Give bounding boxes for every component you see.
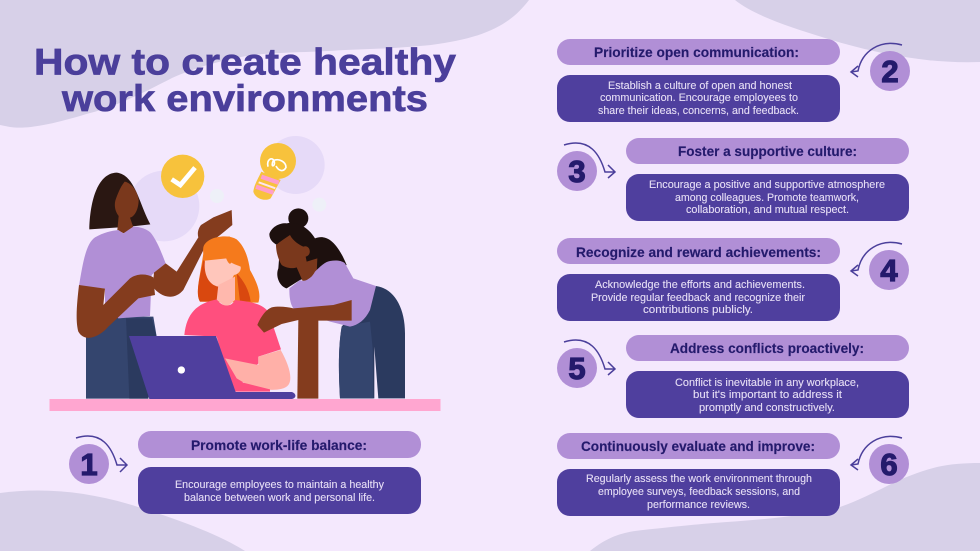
body 2: communication. Encourage employees to [600, 92, 798, 104]
number badge 3 [557, 151, 597, 191]
heading 6: Continuously evaluate and improve: [581, 438, 815, 454]
table top [50, 399, 440, 411]
icon: check mark badge [161, 155, 204, 198]
number badge 5 [557, 348, 597, 388]
background blob: bottom left [0, 491, 245, 551]
arrow 5 [564, 340, 615, 375]
number badge 1 [69, 444, 109, 484]
body 6 [557, 469, 840, 516]
body 3: Encourage a positive and supportive atmosphere [649, 179, 885, 191]
body 5: promptly and constructively. [699, 402, 835, 414]
woman right [257, 208, 405, 399]
body 1 [138, 467, 421, 514]
number badge 2: 2 [881, 54, 899, 89]
heading 2 [557, 39, 840, 65]
background bubbles [129, 136, 326, 241]
illustration: three women at a laptop [77, 136, 405, 399]
heading 4: Recognize and reward achievements: [576, 244, 821, 260]
background blob: top right [735, 0, 980, 62]
step 6: continuously evaluate and improve [557, 433, 909, 516]
number badge 4 [869, 250, 909, 290]
body 2: share their ideas, concerns, and feedback. [598, 105, 799, 117]
heading 6 [557, 433, 840, 459]
heading 3 [626, 138, 909, 164]
number badge 1: 1 [80, 447, 98, 482]
body 6: employee surveys, feedback sessions, and [598, 486, 800, 498]
title: work environments [61, 78, 428, 119]
arrow 1 [76, 436, 127, 472]
woman left [77, 173, 232, 399]
heading 3: Foster a supportive culture: [678, 143, 857, 159]
heading 5: Address conflicts proactively: [670, 340, 864, 356]
number badge 4: 4 [880, 253, 898, 288]
step 5: address conflicts proactively [557, 335, 909, 418]
number badge 5: 5 [568, 351, 586, 386]
heading 2: Prioritize open communication: [594, 44, 799, 60]
body 5: Conflict is inevitable in any workplace, [675, 377, 859, 389]
body 4: Provide regular feedback and recognize their [591, 292, 805, 304]
body 4: contributions publicly. [643, 304, 753, 316]
body 1: Encourage employees to maintain a healthy [175, 479, 384, 491]
body 4: Acknowledge the efforts and achievements. [595, 279, 805, 291]
body 3 [626, 174, 909, 221]
background blob: top left [0, 0, 529, 128]
heading 5 [626, 335, 909, 361]
body 1: balance between work and personal life. [184, 492, 375, 504]
number badge 6: 6 [880, 447, 898, 482]
body 5 [626, 371, 909, 418]
arrow 2 [851, 43, 902, 77]
arrow 3 [564, 143, 615, 178]
title [34, 42, 456, 119]
laptop [129, 336, 295, 399]
body 3: collaboration, and mutual respect. [686, 204, 849, 216]
body 5: but it's important to address it [693, 389, 842, 401]
icon: light bulb [253, 143, 296, 200]
body 6: performance reviews. [647, 499, 750, 511]
number badge 2 [870, 51, 910, 91]
step 2: prioritize open communication [557, 39, 910, 122]
heading 4 [557, 238, 840, 264]
body 2 [557, 75, 840, 122]
arrow 6 [851, 436, 902, 470]
number badge 6 [869, 444, 909, 484]
arrow 4 [851, 242, 902, 276]
step 1: promote work-life balance [69, 431, 421, 514]
background blob: bottom right [590, 463, 980, 551]
body 4 [557, 274, 840, 321]
title: How to create healthy [34, 42, 456, 82]
body 6: Regularly assess the work environment through [586, 473, 812, 485]
heading 1 [138, 431, 421, 458]
number badge 3: 3 [568, 154, 586, 189]
heading 1: Promote work-life balance: [191, 437, 367, 453]
step 4: recognize and reward achievements [557, 238, 909, 321]
step 3: foster a supportive culture [557, 138, 909, 221]
body 3: among colleagues. Promote teamwork, [675, 192, 859, 204]
woman middle [184, 236, 290, 392]
body 2: Establish a culture of open and honest [608, 80, 792, 92]
